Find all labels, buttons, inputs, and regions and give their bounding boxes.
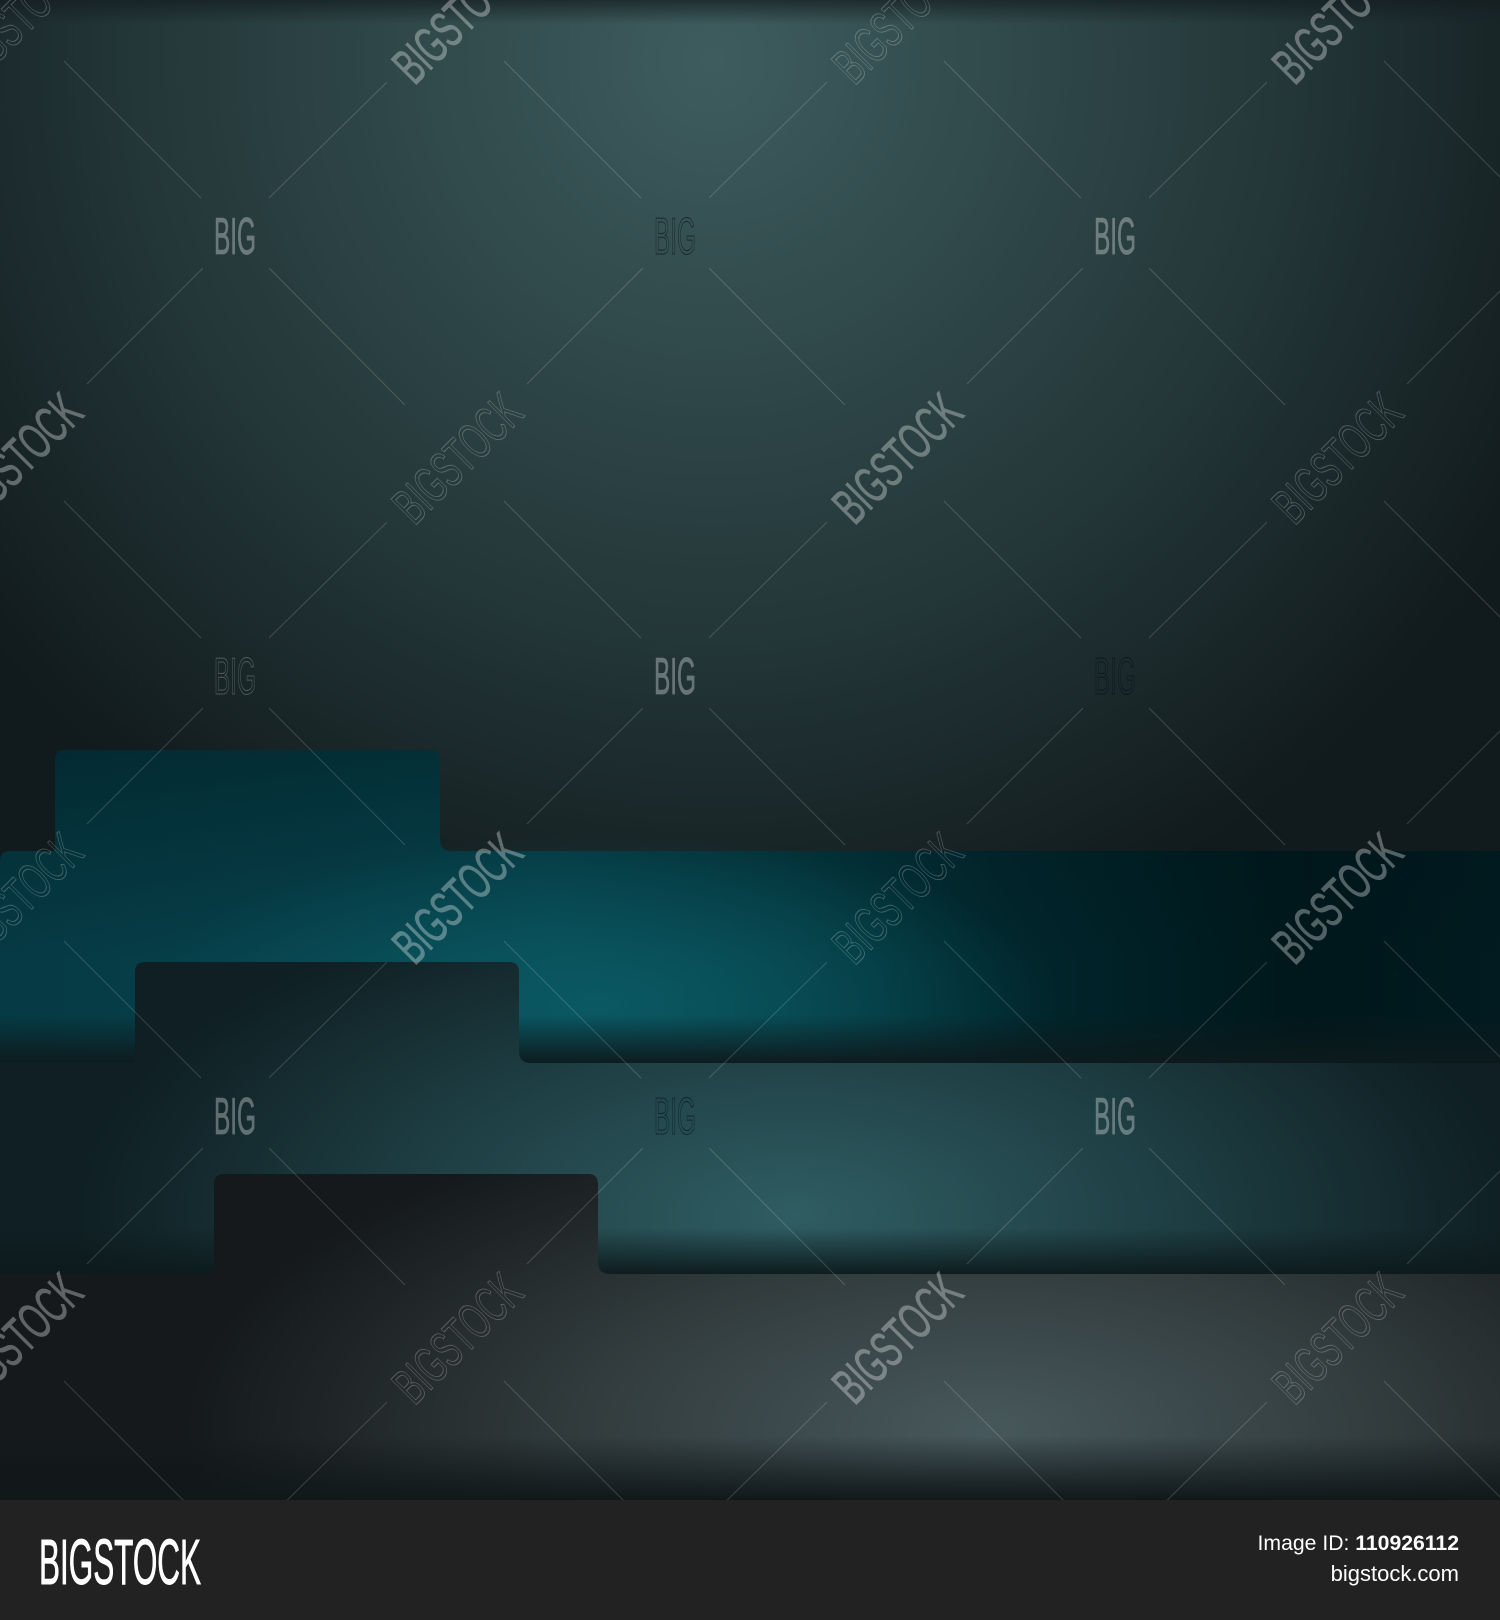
panel: teal tabbed band (0, 750, 1500, 1300)
watermark: diagonal BIGSTOCK labels: BIGSTOCK (382, 383, 534, 535)
panel: grey tabbed band (0, 1174, 1500, 1500)
watermark: diagonal BIGSTOCK labels: BIGSTOCK (1262, 1263, 1414, 1415)
watermark: BIG labels: BIG (214, 648, 256, 706)
watermark: BIG labels: BIG (654, 648, 696, 706)
watermark: BIG labels: BIG (214, 208, 256, 266)
watermark: diagonal BIGSTOCK labels: BIGSTOCK (822, 823, 974, 975)
panel: muted teal tabbed band (0, 962, 1500, 1400)
footer: site address: bigstock.com (1331, 1561, 1459, 1586)
watermark: diagonal BIGSTOCK labels: BIGSTOCK (1262, 383, 1414, 535)
text: BIG (1094, 208, 1136, 266)
watermark: BIG labels: BIG (214, 1088, 256, 1146)
watermark: diagonal BIGSTOCK labels: BIGSTOCK (822, 1263, 974, 1415)
watermark: diagonal BIGSTOCK labels: BIGSTOCK (822, 383, 974, 535)
footer: image ID: Image ID: 110926112 (1258, 1532, 1459, 1555)
watermark: diagonal BIGSTOCK labels: BIGSTOCK (1262, 823, 1414, 975)
watermark: BIG labels: BIG (654, 1088, 696, 1146)
text: BIG (1094, 648, 1136, 706)
footer bar (0, 1500, 1500, 1620)
watermark: BIG labels: BIG (654, 208, 696, 266)
watermark: diagonal BIGSTOCK labels: BIGSTOCK (382, 1263, 534, 1415)
watermark: BIG labels (214, 208, 1136, 1146)
watermark: diagonal BIGSTOCK labels: BIGSTOCK (382, 823, 534, 975)
footer bar: BIGSTOCK (39, 1526, 201, 1598)
text: BIG (1094, 1088, 1136, 1146)
